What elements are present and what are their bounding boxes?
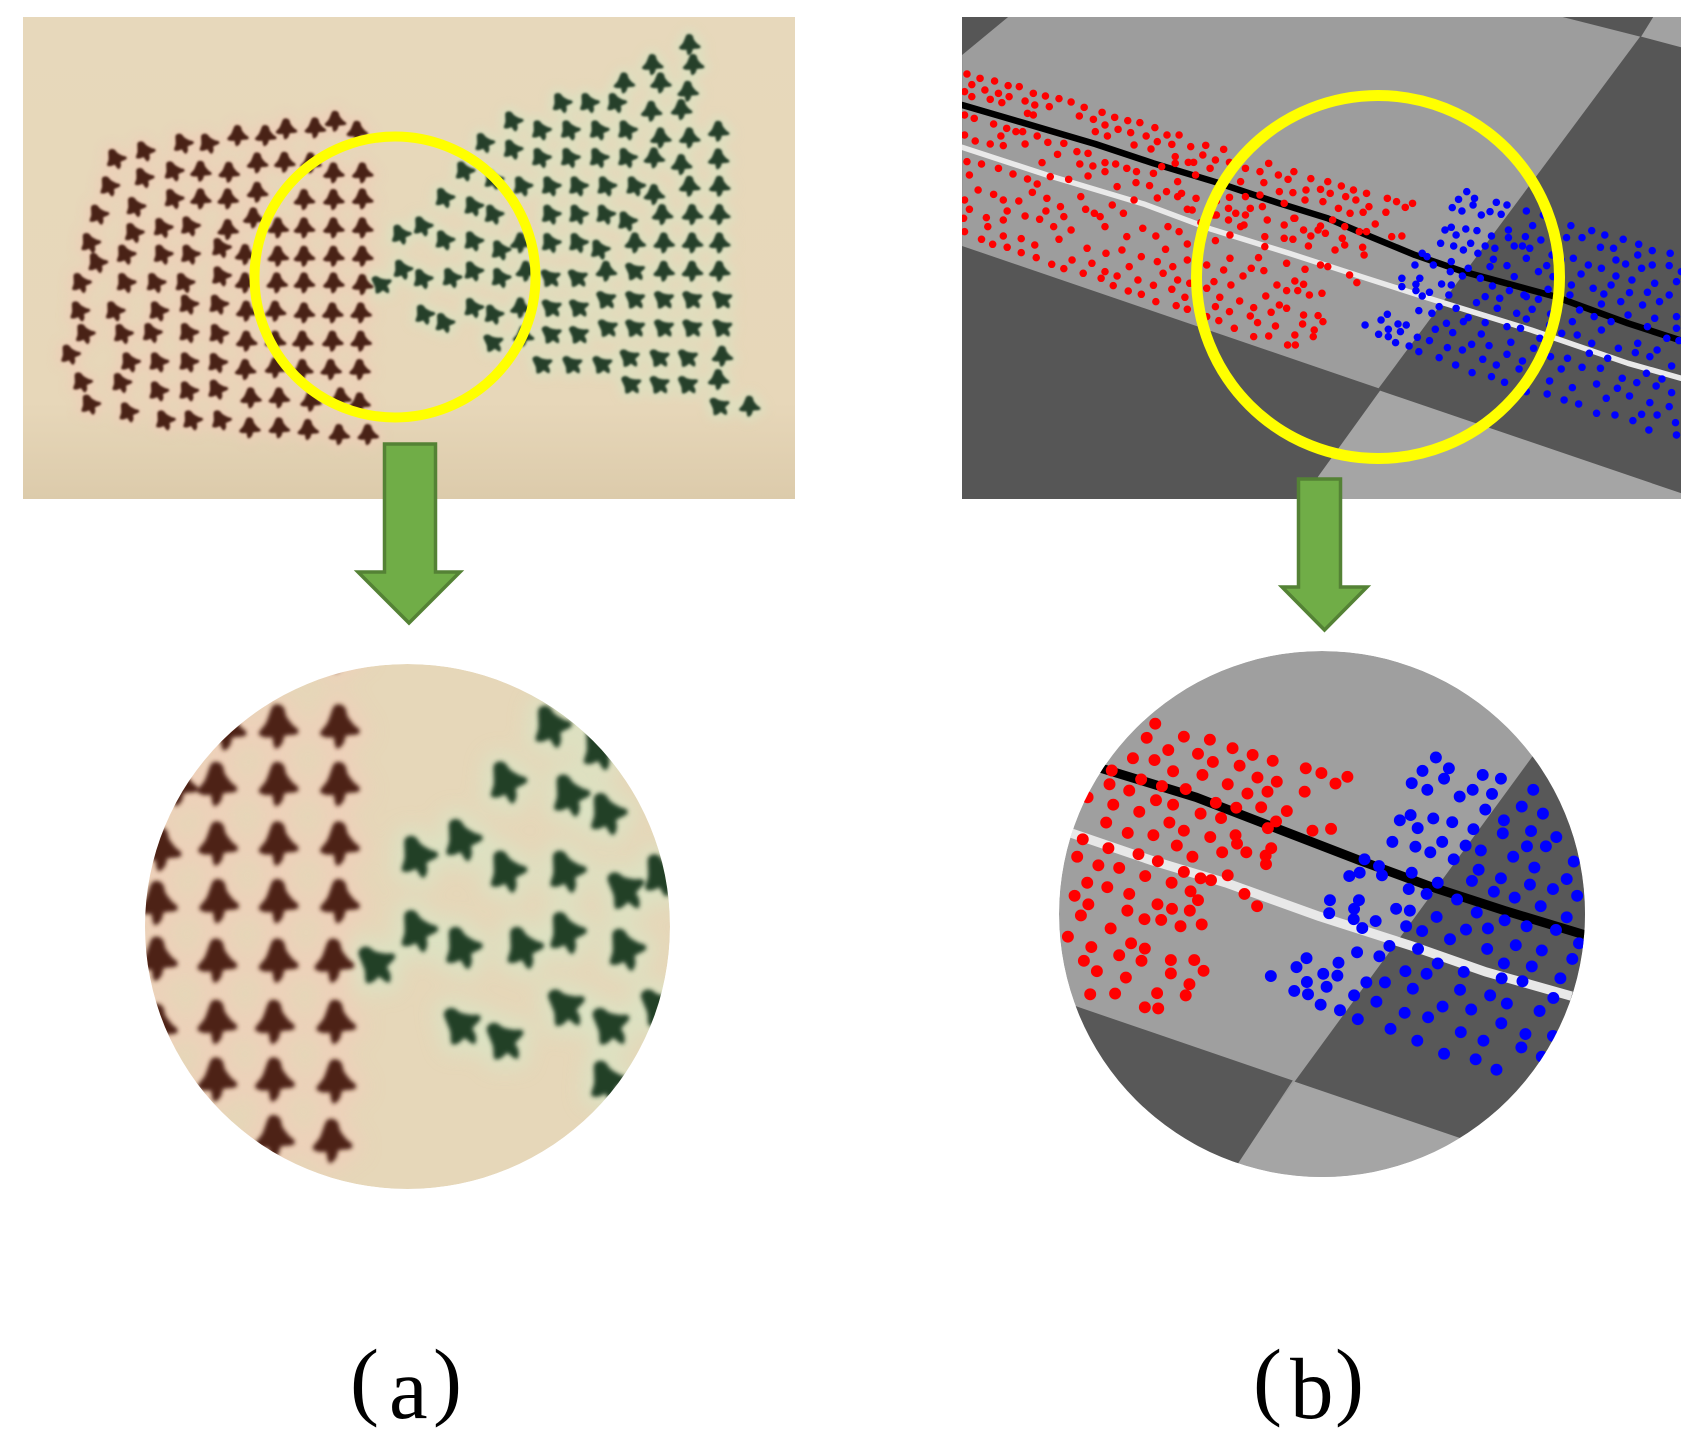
magnified robots: [145, 672, 668, 1166]
blue dots swarm: [1365, 192, 1681, 435]
checker light tile top right: [1641, 17, 1681, 47]
white reference line: [962, 147, 1681, 378]
checker light tile bottom: [1311, 391, 1681, 499]
magnified circle b: [1059, 651, 1585, 1177]
green robots group: [365, 34, 761, 420]
magnified green robots: [355, 702, 668, 1100]
black line magnified: [1101, 768, 1585, 935]
swarm robots: [55, 34, 761, 445]
dark tile right: [1294, 756, 1585, 1138]
crowd halos: [154, 50, 742, 410]
white line magnified: [1070, 833, 1572, 996]
checker light tile main: [962, 17, 1640, 388]
magnified red robots: [138, 628, 360, 1163]
red robots group: [55, 111, 379, 445]
panel a: video frame of robot swarm: [23, 17, 795, 499]
red dots swarm: [964, 74, 1413, 345]
blue dots magnified: [1271, 757, 1579, 1070]
label (a): (a): [350, 1331, 462, 1437]
yellow highlight circle a: [254, 136, 536, 418]
dark tile lower left: [1076, 1006, 1293, 1164]
black reference line: [962, 105, 1681, 341]
lower light tile: [1235, 1138, 1460, 1177]
magnified halos: [145, 669, 664, 1160]
yellow highlight circle b: [1196, 96, 1560, 458]
label (b): (b): [1253, 1331, 1364, 1437]
arrow b: [1282, 479, 1367, 630]
arrow a: [358, 444, 460, 623]
red dots magnified: [1068, 724, 1347, 1008]
panel b: simulation frame: [962, 17, 1681, 499]
magnified circle a: [145, 664, 670, 1189]
